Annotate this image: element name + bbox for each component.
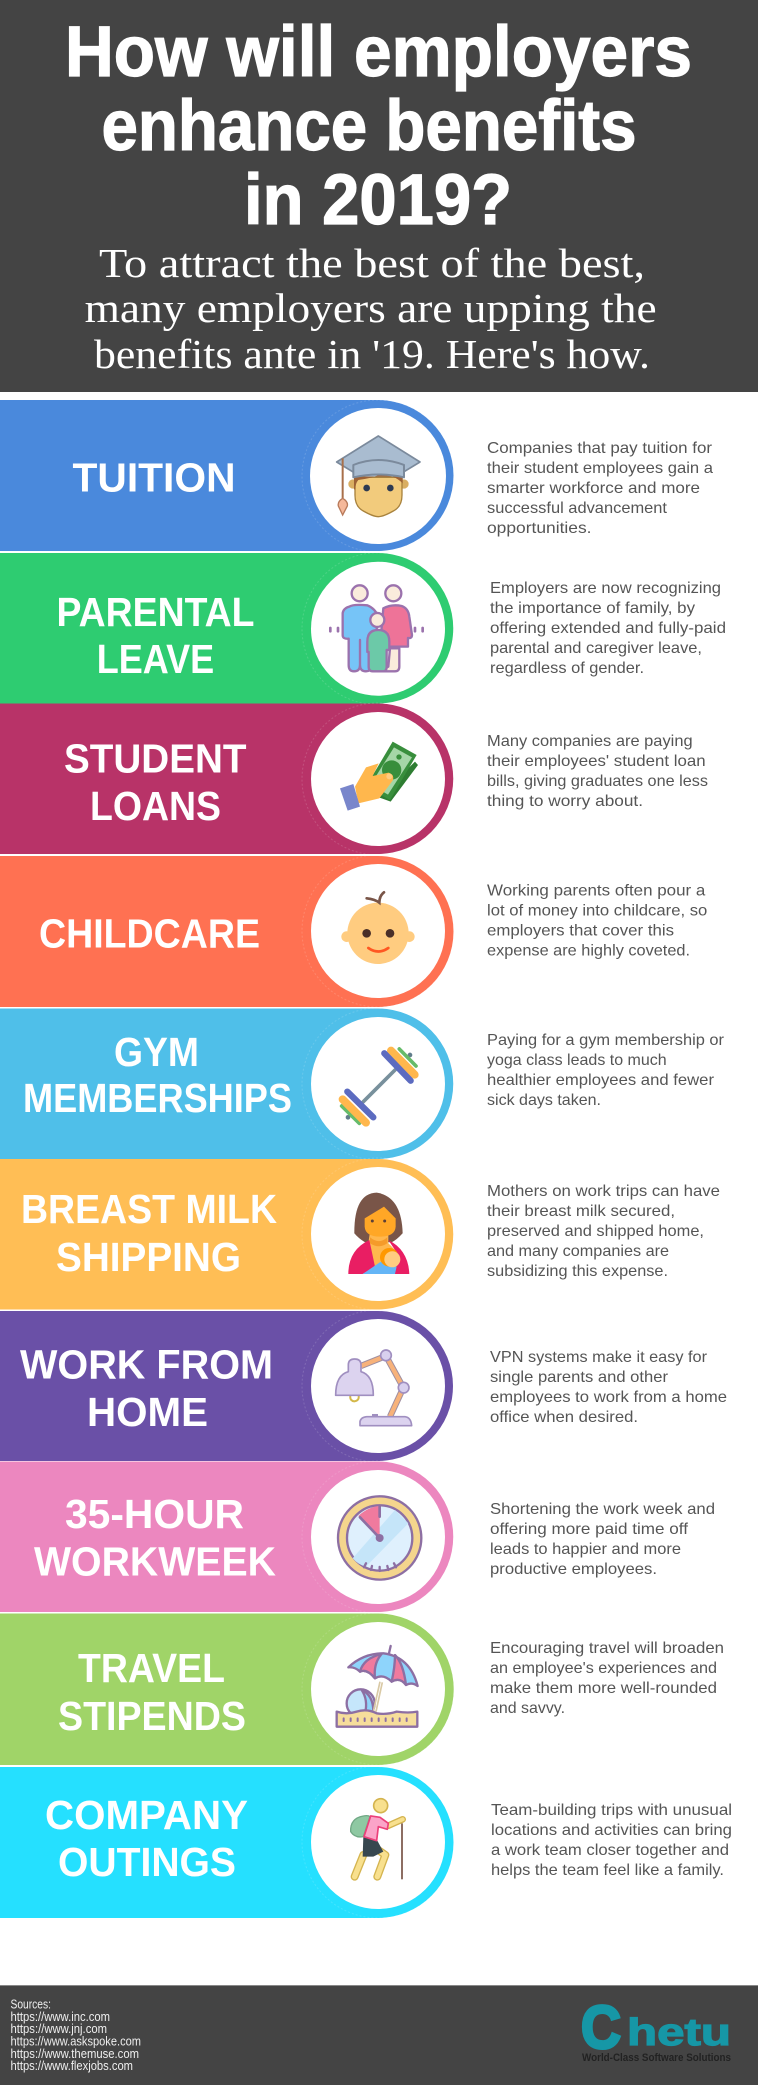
text: work from home: single parents and other [490,1369,669,1386]
panel: student loans [0,703,708,855]
text: parental leave [490,580,726,677]
heading: student loans: STUDENT [64,736,246,782]
text: work from home [490,1349,727,1426]
heading: 35-hour workweek: 35-HOUR [65,1491,244,1537]
subtitle [85,240,657,377]
text: tuition: smarter workforce and more [487,480,700,497]
title: How will employers [65,13,692,92]
icon: dumbbell [342,1049,416,1123]
icon: hiker [351,1799,403,1879]
text: company outings: helps the team feel like a family. [491,1862,724,1879]
heading: gym memberships: MEMBERSHIPS [23,1075,292,1121]
text: student loans: bills, giving graduates one less [487,773,708,790]
text: company outings [491,1802,732,1879]
heading: travel stipends: TRAVEL [78,1645,225,1691]
heading: student loans: LOANS [90,783,221,829]
heading: company outings: OUTINGS [58,1839,236,1885]
text: breast milk shipping: preserved and shipped home, [487,1223,704,1240]
heading: 35-hour workweek: WORKWEEK [34,1539,276,1585]
heading: breast milk shipping: SHIPPING [56,1234,241,1280]
text: childcare: employers that cover this [487,923,674,940]
logo: Chetu: C [581,1994,621,2061]
text: parental leave: offering extended and fully-paid [490,620,726,637]
text: 35-hour workweek: productive employees. [490,1561,657,1578]
text: gym memberships: Paying for a gym membership or [487,1032,725,1049]
text: breast milk shipping: and many companies are [487,1243,669,1260]
text: work from home: employees to work from a home [490,1389,727,1406]
text: travel stipends: an employee's experiences and [490,1660,717,1677]
heading: work from home [20,1342,273,1435]
icon: nursing mother [348,1193,409,1274]
heading: travel stipends: STIPENDS [58,1693,246,1739]
title: enhance benefits [102,87,636,166]
sources list [10,1998,141,2073]
panel: company outings [0,1766,732,1918]
footer panel [0,1985,758,2085]
icon: family [329,585,424,671]
panel: breast milk shipping [0,1158,720,1310]
text: student loans: thing to worry about. [487,793,643,810]
text: travel stipends: make them more well-rounded [490,1680,717,1697]
text: tuition: their student employees gain a [487,460,713,477]
text: breast milk shipping: Mothers on work trips can have [487,1183,720,1200]
text: parental leave: the importance of family, by [490,600,695,617]
text: gym memberships: yoga class leads to much [487,1052,667,1069]
title: in 2019? [244,161,512,240]
text: gym memberships: sick days taken. [487,1092,601,1109]
header panel [0,0,758,392]
text: 35-hour workweek: offering more paid time off [490,1521,689,1538]
text: parental leave: Employers are now recognizing [490,580,721,597]
sources list: https://www.themuse.com [10,2047,139,2061]
title [65,13,692,240]
text: tuition: opportunities. [487,520,592,537]
logo: Chetu: hetu [627,2012,731,2054]
icon: graduate in cap [337,436,420,517]
text: travel stipends [490,1640,724,1717]
sources list: https://www.jnj.com [10,2022,107,2036]
text: breast milk shipping: subsidizing this expense. [487,1263,668,1280]
heading: parental leave [56,589,254,682]
text: 35-hour workweek: Shortening the work week and [490,1501,715,1518]
logo: Chetu [581,1994,731,2064]
heading: student loans [64,736,246,829]
text: student loans [487,733,708,810]
icon: clock [338,1496,421,1580]
icon: desk lamp [336,1350,412,1426]
text: travel stipends: Encouraging travel will broaden [490,1640,724,1657]
text: work from home: VPN systems make it easy for [490,1349,708,1366]
subtitle: many employers are upping the [85,285,657,331]
text: parental leave: parental and caregiver leave, [490,640,702,657]
heading: travel stipends [58,1645,246,1739]
icon: beach umbrella [337,1646,418,1727]
text: childcare: expense are highly coveted. [487,943,690,960]
panel: gym memberships [0,1008,725,1160]
heading: gym memberships [23,1029,292,1121]
text: gym memberships: healthier employees and fewer [487,1072,715,1089]
panel: work from home [0,1310,727,1462]
heading: breast milk shipping [21,1186,277,1280]
text: tuition: successful advancement [487,500,668,517]
sources list: Sources: [10,1998,51,2012]
text: breast milk shipping [487,1183,720,1280]
heading: gym memberships: GYM [114,1029,199,1075]
sources list: https://www.flexjobs.com [10,2059,133,2073]
heading: company outings: COMPANY [45,1792,248,1838]
logo: Chetu: World-Class Software Solutions [582,2052,731,2064]
text: company outings: a work team closer together and [491,1842,729,1859]
sources list: https://www.inc.com [10,2010,110,2024]
text: tuition [487,440,713,537]
heading: work from home: WORK FROM [20,1342,273,1388]
heading: company outings [45,1792,248,1885]
text: childcare: lot of money into childcare, so [487,903,707,920]
icon: hand with cash [340,742,418,811]
subtitle: benefits ante in '19. Here's how. [94,331,650,377]
text: 35-hour workweek [490,1501,715,1578]
text: work from home: office when desired. [490,1409,638,1426]
heading: work from home: HOME [87,1389,208,1435]
text: gym memberships [487,1032,725,1109]
sources list: https://www.askspoke.com [10,2035,141,2049]
heading: breast milk shipping: BREAST MILK [21,1186,277,1232]
text: student loans: Many companies are paying [487,733,693,750]
text: childcare [487,883,707,960]
panel: childcare [0,855,707,1007]
panel: tuition [0,400,713,552]
panel: travel stipends [0,1613,724,1765]
text: breast milk shipping: their breast milk secured, [487,1203,675,1220]
text: student loans: their employees' student loan [487,753,706,770]
heading: parental leave: PARENTAL [56,589,254,635]
text: travel stipends: and savvy. [490,1700,565,1717]
text: tuition: Companies that pay tuition for [487,440,713,457]
text: company outings: locations and activities can bring [491,1822,732,1839]
text: 35-hour workweek: leads to happier and more [490,1541,681,1558]
text: childcare: Working parents often pour a [487,883,705,900]
text: parental leave: regardless of gender. [490,660,644,677]
heading: childcare: CHILDCARE [39,910,260,956]
panel: parental leave [0,553,726,705]
icon: baby face [341,892,415,964]
subtitle: To attract the best of the best, [99,240,645,286]
heading: 35-hour workweek [34,1491,276,1585]
text: company outings: Team-building trips with unusual [491,1802,732,1819]
heading: tuition: TUITION [72,455,236,501]
heading: parental leave: LEAVE [97,636,214,682]
panel: 35-hour workweek [0,1461,715,1613]
